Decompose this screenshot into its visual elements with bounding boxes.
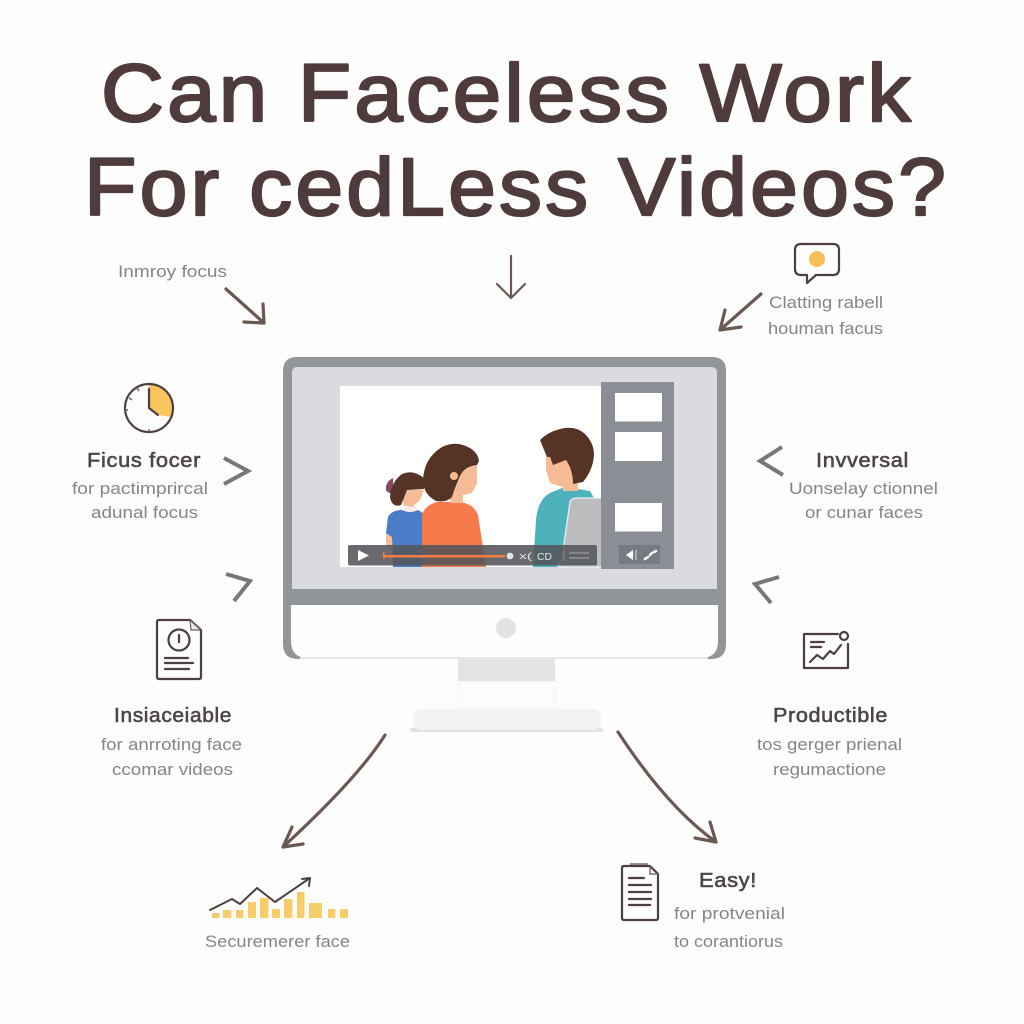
text block: Insiaceiable: Insiaceiable [114,705,232,727]
arrow: chevron upper right [760,447,783,475]
arrow: chevron lower right [755,577,779,603]
arrow: top left [226,289,264,323]
text block: Productible [757,705,902,779]
label: top right [768,293,883,338]
label: top left: Inmroy focus [118,262,227,281]
icon: document [157,620,201,679]
text block: Easy: to corantiorus [674,932,783,951]
text block: Invversal: Uonselay ctionnel [789,479,938,498]
text block: Productible: Productible [773,705,888,727]
person: woman [422,444,486,567]
text block: Productible: regumactione [773,760,886,779]
text block: Insiaceiable: ccomar videos [112,760,233,779]
text block: Ficus focer: adunal focus [91,503,198,522]
text block: Insiaceiable: for anrroting face [101,735,242,754]
arrow: chevron upper left [224,458,248,484]
video control bar: CD [537,552,552,563]
arrow: curved lower left [283,735,385,847]
arrow: curved lower right [618,732,716,842]
title [84,48,949,233]
icon: clock [125,384,173,432]
text block: Invversal: or cunar faces [805,503,923,522]
text block: Productible: tos gerger prienal [757,735,902,754]
text block: Ficus focer: Ficus focer [87,450,201,472]
video area [340,386,602,567]
label: bottom left: Securemerer face [205,932,350,951]
video sidebar [601,382,674,569]
text block: Ficus focer [72,450,208,522]
text block: Ficus focer: for pactimprircal [72,479,208,498]
label: top right: Clatting rabell [769,293,883,312]
text block: Insiaceiable [101,705,242,779]
text block: Invversal: Invversal [816,450,909,472]
title: For cedLess Videos? [84,142,949,233]
monitor [283,357,726,732]
icon: speech bubble [795,244,839,283]
icon: clipboard [622,864,658,920]
text block: Invversal [789,450,938,522]
person: man [533,428,602,567]
text block: Easy [674,870,785,951]
text block: Easy: for protvenial [674,904,785,923]
video control bar: x( [519,551,532,561]
icon: chart panel [804,632,848,668]
monitor frame [283,357,726,659]
icon: bar chart [210,878,348,918]
arrow: chevron lower left [226,574,250,601]
video control bar [348,545,597,566]
text block: Easy: Easy! [699,870,757,892]
label: top right: houman facus [768,319,883,338]
arrow: top right [720,294,761,330]
monitor stand [410,658,603,732]
person: child [386,472,424,567]
arrow: top center [497,256,525,298]
title: Can Faceless Work [101,48,914,139]
